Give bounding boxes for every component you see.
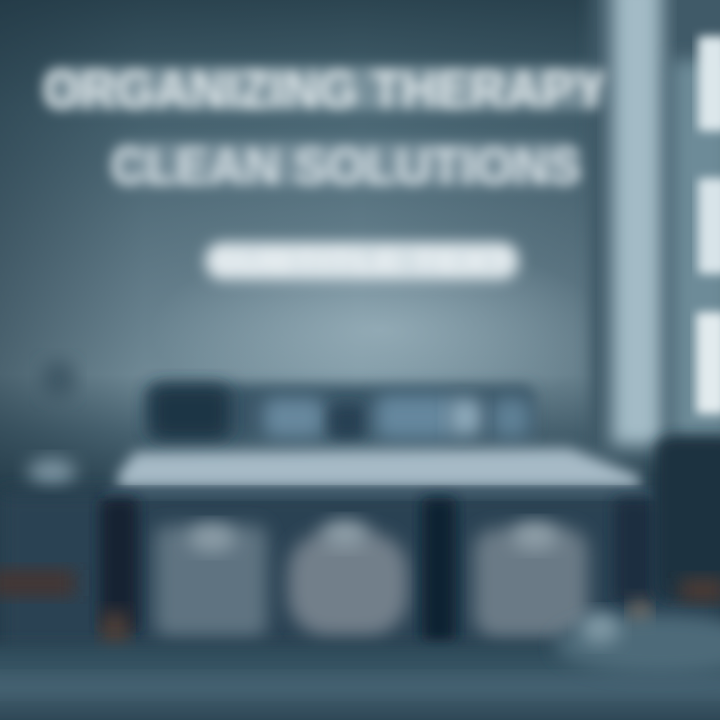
subtitle pill: SUBTITLE TEXT: [212, 243, 513, 279]
items on the table: [145, 385, 535, 440]
basket left: [155, 524, 267, 637]
table legs: [100, 498, 654, 648]
chair: [655, 436, 720, 602]
brown side furniture: [0, 570, 75, 596]
window pane top: [698, 36, 720, 131]
floor: [0, 612, 720, 720]
table top: [118, 448, 640, 488]
window pane middle: [698, 178, 720, 274]
heading line 2: CLEAN SOLUTIONS: [110, 138, 582, 196]
heading line 1: ORGANIZING THERAPY: [42, 60, 607, 120]
left wall objects: [28, 360, 76, 486]
window column: [590, 0, 720, 460]
basket right: [474, 522, 588, 638]
basket centre: [288, 520, 408, 636]
table: [0, 448, 720, 652]
window pane bottom: [696, 312, 720, 414]
